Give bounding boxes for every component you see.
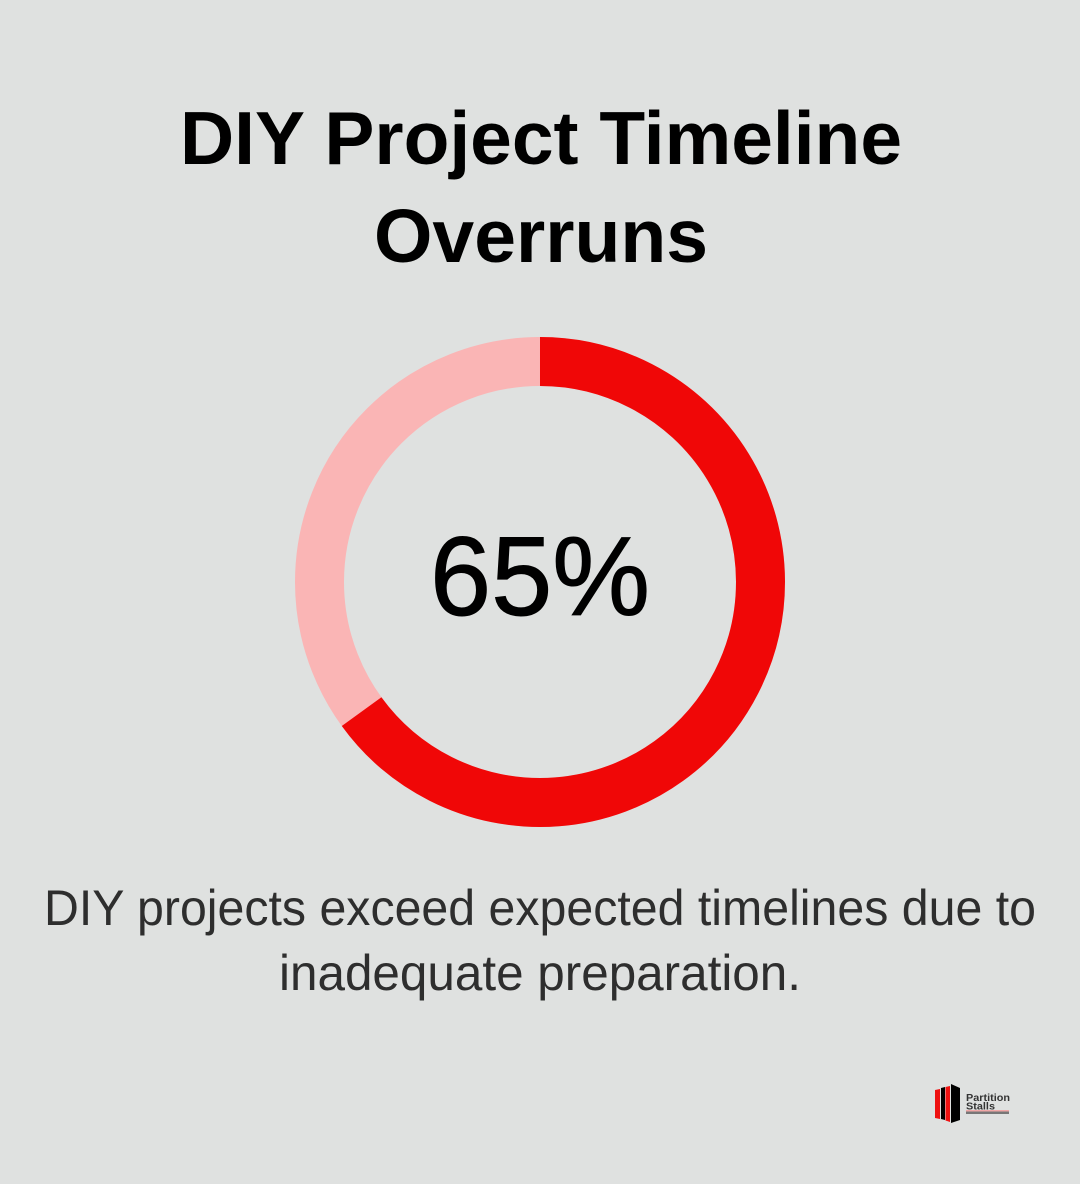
description text: inadequate preparation. (279, 945, 801, 1001)
title (180, 96, 902, 278)
logo icon (935, 1084, 960, 1123)
logo: Partition Stalls (935, 1084, 1010, 1123)
donut track (320, 362, 760, 802)
center percentage: 65% (430, 514, 650, 639)
logo tagline strip (966, 1110, 1009, 1112)
donut chart: 65% (320, 362, 760, 803)
description text (44, 880, 1036, 1001)
logo wordmark: Partition (966, 1092, 1010, 1104)
title: DIY Project Timeline (180, 96, 902, 180)
donut value arc (362, 362, 760, 803)
logo: Partition Stalls: Stalls (966, 1100, 995, 1112)
description text: DIY projects exceed expected timelines due to (44, 880, 1036, 936)
title: Overruns (374, 194, 708, 278)
